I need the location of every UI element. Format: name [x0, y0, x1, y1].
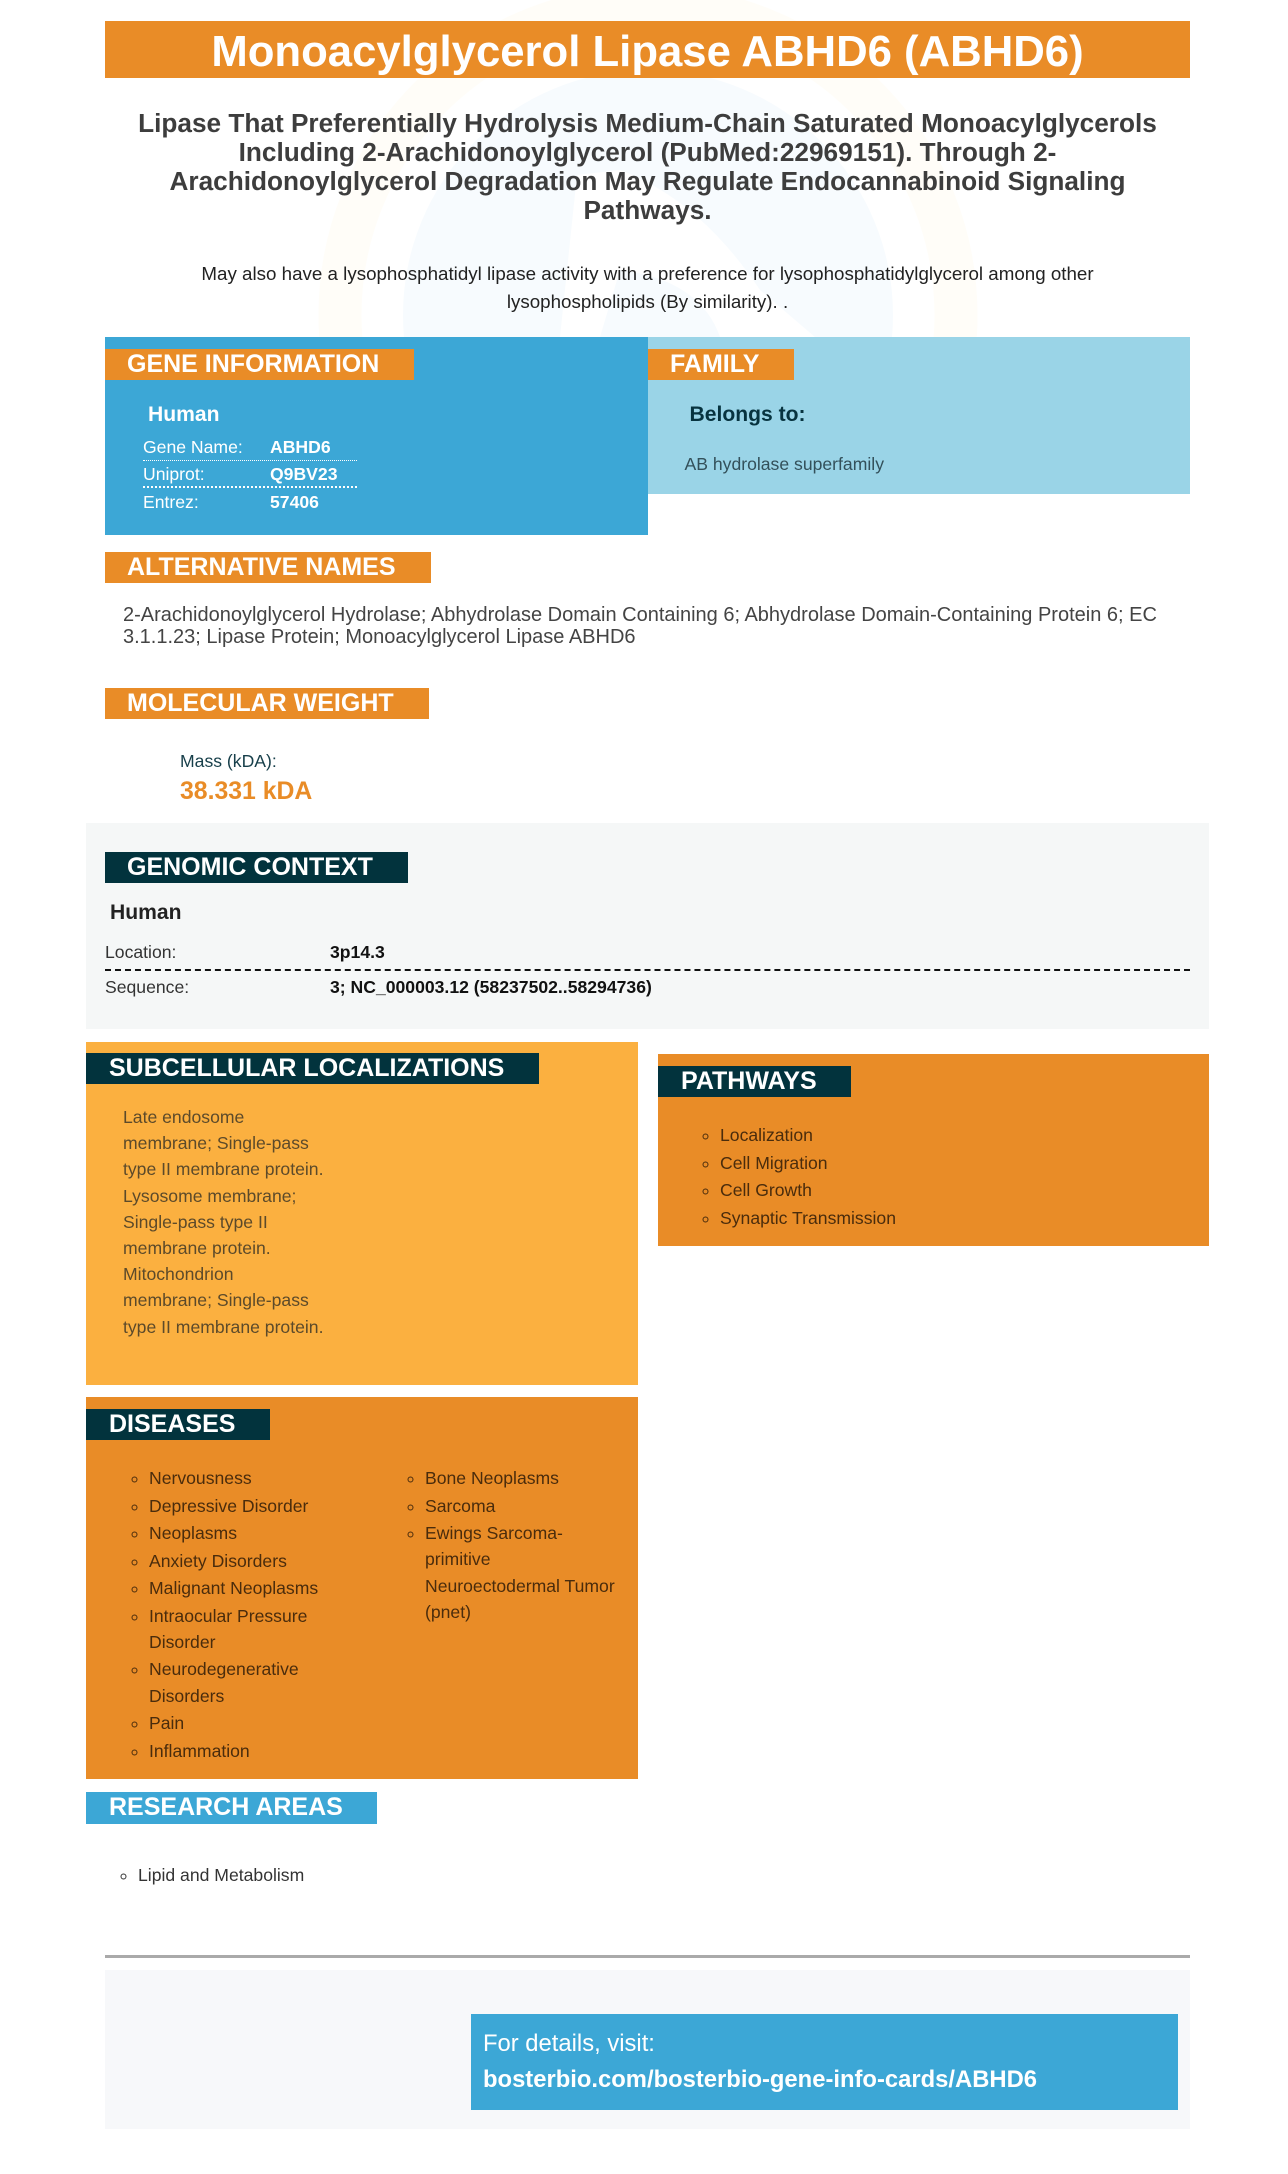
panel: genomic context [86, 823, 1209, 1029]
title banner [105, 21, 1190, 78]
diseases list column 1: Nervousness [149, 1468, 252, 1488]
mass label: Mass (kDA): [180, 751, 277, 771]
family value: AB hydrolase superfamily [684, 454, 884, 474]
description: May also have a lysophosphatidyl lipase activity with a preference for lysophosphatidylglycerol among other [201, 263, 1094, 284]
callout text: For details, visit: [483, 2030, 655, 2057]
subtitle: Arachidonoylglycerol Degradation May Regulate Endocannabinoid Signaling [170, 166, 1125, 196]
alternative names text: 2-Arachidonoylglycerol Hydrolase; Abhydrolase Domain Containing 6; Abhydrolase Domain-Containing Protein 6; EC [123, 604, 1157, 626]
diseases list column 1: Malignant Neoplasms [149, 1578, 318, 1598]
location row: 3p14.3 [330, 942, 385, 962]
alternative names text [123, 604, 1157, 648]
footer rule [105, 1955, 1190, 1958]
panel: pathways [658, 1054, 1209, 1246]
title banner: Monoacylglycerol Lipase ABHD6 (ABHD6) [211, 27, 1084, 76]
panel: diseases [86, 1397, 638, 1779]
uniprot row: Q9BV23 [270, 464, 337, 484]
heading: family: FAMILY [670, 350, 759, 378]
heading: pathways [658, 1066, 851, 1097]
uniprot row: Uniprot: [143, 464, 205, 484]
heading: diseases [86, 1409, 270, 1440]
diseases list column 1: Anxiety Disorders [149, 1550, 287, 1570]
heading: gene information: GENE INFORMATION [127, 350, 379, 378]
species label: Human [110, 901, 182, 924]
panel: subcellular localizations [86, 1042, 638, 1385]
sequence row: Sequence: [105, 977, 189, 997]
diseases list column 1: Neoplasms [149, 1523, 237, 1543]
localization text: membrane; Single-pass [123, 1133, 309, 1153]
localization text: Late endosome [123, 1107, 244, 1127]
sequence row [105, 977, 652, 997]
pathways list: Cell Migration [720, 1152, 828, 1172]
belongs to label: Belongs to: [690, 403, 806, 426]
entrez row: Entrez: [143, 492, 199, 512]
diseases list column 1 [132, 1468, 318, 1761]
background watermark [0, 0, 1288, 337]
location row: Location: [105, 942, 176, 962]
heading: family [648, 349, 794, 380]
heading: molecular weight: MOLECULAR WEIGHT [127, 689, 394, 717]
entrez row [143, 492, 319, 512]
location row [105, 939, 1190, 971]
alternative names text: 3.1.1.23; Lipase Protein; Monoacylglycerol Lipase ABHD6 [123, 626, 636, 648]
pathways list: Synaptic Transmission [720, 1208, 896, 1228]
sequence row: 3; NC_000003.12 (58237502..58294736) [330, 977, 652, 997]
diseases list column 2 [408, 1468, 615, 1622]
diseases list column 1: Intraocular Pressure Disorder [149, 1606, 307, 1652]
localization text: Mitochondrion [123, 1264, 234, 1284]
localization text: membrane; Single-pass [123, 1290, 309, 1310]
pathways list: Localization [720, 1125, 813, 1145]
callout url: bosterbio.com/bosterbio-gene-info-cards/ABHD6 [483, 2066, 1037, 2093]
description [201, 263, 1094, 312]
diseases list column 1: Inflammation [149, 1741, 250, 1761]
localization text: type II membrane protein. [123, 1159, 323, 1179]
panel: gene information [105, 337, 648, 535]
localization text: Lysosome membrane; [123, 1186, 296, 1206]
callout: details link [471, 2014, 1178, 2110]
diseases list column 1: Pain [149, 1713, 184, 1733]
species label: Human [148, 403, 220, 426]
pathways list [702, 1125, 896, 1228]
gene name row [143, 434, 357, 461]
panel: footer [105, 1970, 1190, 2129]
heading: pathways: PATHWAYS [681, 1067, 817, 1095]
mass value: 38.331 kDA [180, 778, 312, 805]
molecular weight value [180, 751, 312, 805]
localization text: type II membrane protein. [123, 1317, 323, 1337]
diseases list column 1: Neurodegenerative Disorders [149, 1659, 299, 1706]
heading: genomic context: GENOMIC CONTEXT [127, 853, 373, 881]
subtitle [138, 108, 1157, 225]
localization text: membrane protein. [123, 1238, 271, 1258]
description: lysophospholipids (By similarity). . [507, 291, 788, 312]
uniprot row [143, 461, 357, 488]
subtitle: Including 2-Arachidonoylglycerol (PubMed:22969151). Through 2- [239, 137, 1056, 167]
diseases list column 2: Sarcoma [425, 1496, 495, 1516]
panel: family [648, 337, 1190, 494]
heading: alternative names: ALTERNATIVE NAMES [127, 553, 396, 581]
research areas list: Lipid and Metabolism [138, 1865, 304, 1885]
heading: research areas: RESEARCH AREAS [109, 1793, 343, 1821]
heading: subcellular localizations: SUBCELLULAR LOCALIZATIONS [109, 1054, 504, 1082]
localization text: Single-pass type II [123, 1212, 268, 1232]
subtitle: Pathways. [583, 195, 712, 225]
diseases list column 2: Ewings Sarcoma-primitive Neuroectodermal Tumor (pnet) [425, 1523, 615, 1622]
heading: diseases: DISEASES [109, 1410, 235, 1438]
pathways list: Cell Growth [720, 1180, 812, 1200]
localization text [123, 1107, 323, 1337]
gene name row: ABHD6 [270, 437, 331, 457]
diseases list column 2: Bone Neoplasms [425, 1468, 559, 1488]
gene name row: Gene Name: [143, 437, 243, 457]
diseases list column 1: Depressive Disorder [149, 1496, 308, 1516]
subtitle: Lipase That Preferentially Hydrolysis Medium-Chain Saturated Monoacylglycerols [138, 108, 1157, 138]
entrez row: 57406 [270, 492, 319, 512]
